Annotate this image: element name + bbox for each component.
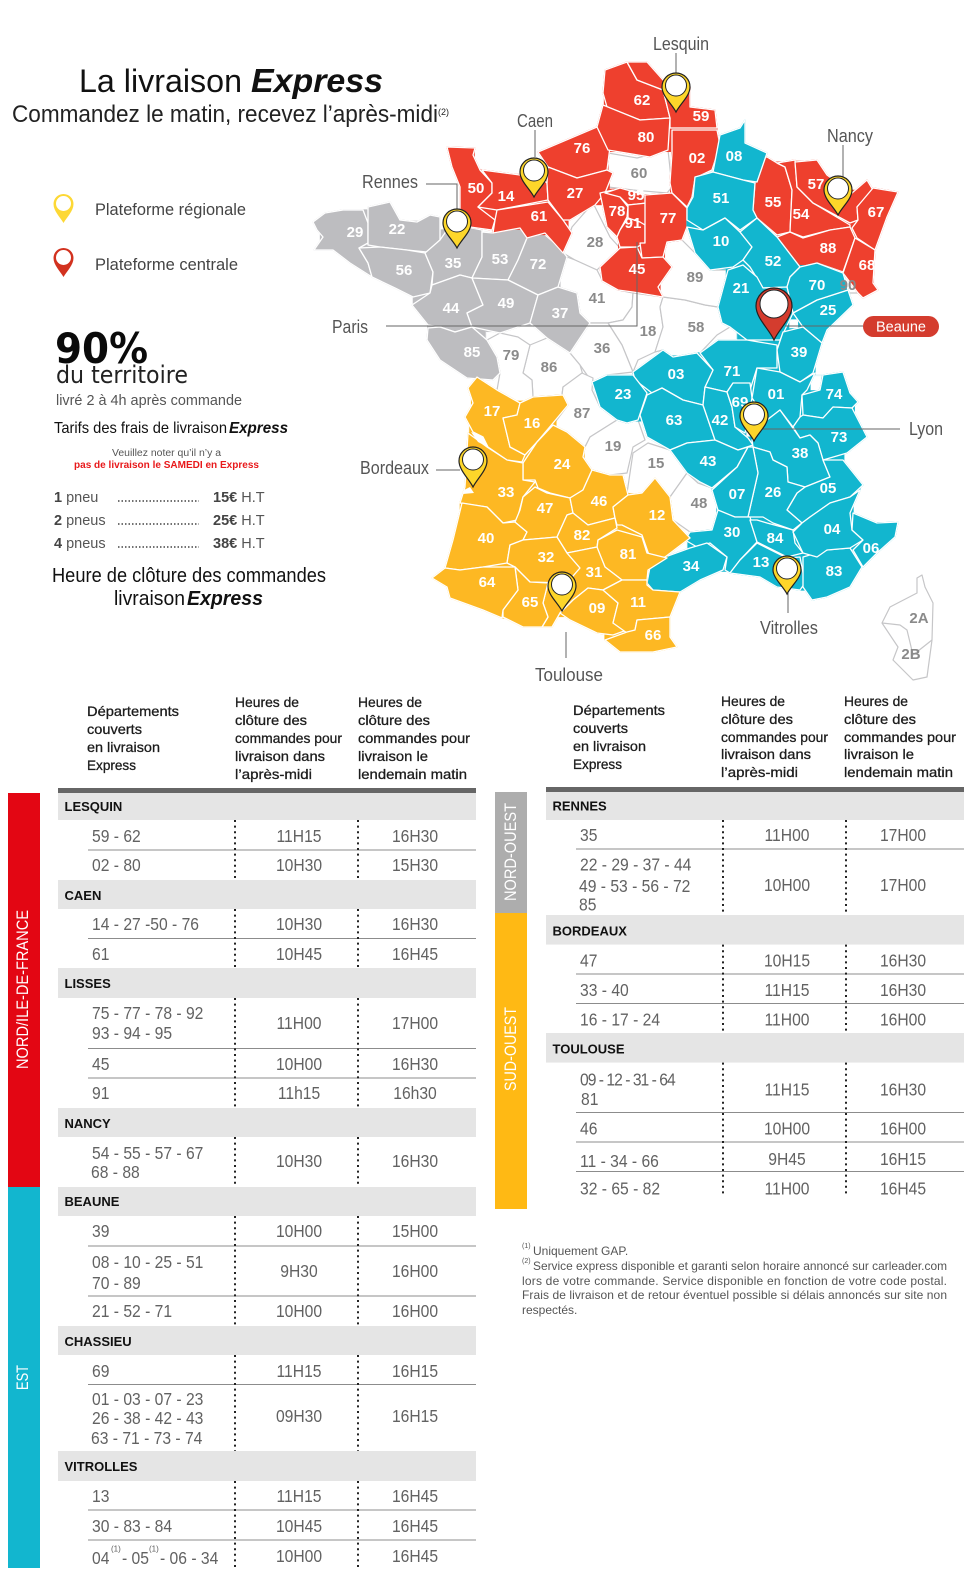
table: left: 93 - 94 - 95 — [92, 1023, 172, 1043]
table: right: TOULOUSE — [552, 1042, 625, 1056]
table: left: 16H30 — [392, 1054, 438, 1074]
callout: Caen: Caen — [517, 111, 553, 131]
table: right: 10H00 — [764, 1118, 810, 1139]
table: left: 01 - 03 - 07 - 23 — [92, 1389, 203, 1409]
department numbers: 68 — [859, 257, 875, 274]
table: left: 69 — [92, 1361, 109, 1381]
stat: 90% du territoire: livré 2 à 4h après commande — [56, 393, 242, 409]
table: left: CAEN — [64, 888, 101, 903]
department numbers: 66 — [645, 627, 661, 644]
callout: Nancy: Nancy — [827, 126, 873, 146]
table: left headers: livraison dans — [235, 748, 325, 764]
table: left: 10H30 — [276, 855, 322, 875]
department numbers: 70 — [809, 277, 825, 294]
department numbers: 43 — [700, 453, 716, 470]
table: right headers: commandes pour — [844, 729, 956, 745]
department numbers: 40 — [478, 530, 494, 547]
department numbers — [347, 92, 884, 644]
table: left: 09H30 — [276, 1406, 322, 1426]
title: Express — [251, 62, 383, 99]
department numbers: 26 — [765, 484, 781, 501]
footnotes: lors de votre commande. Service disponible en fonction de votre code postal. — [522, 1274, 947, 1288]
map of France: 48 — [691, 495, 707, 512]
callout: Beaune: Beaune — [876, 320, 926, 336]
table: right headers: livraison dans — [721, 746, 811, 762]
table: right — [546, 787, 964, 1199]
price list: 1 pneu — [54, 490, 98, 506]
department numbers: 78 — [609, 203, 625, 220]
table: left headers: lendemain matin — [358, 766, 467, 782]
table: left headers: clôture des — [235, 712, 307, 728]
stat: 90% du territoire — [55, 324, 242, 409]
heading: heure de clôture: Heure de clôture des commandes — [52, 565, 326, 587]
department numbers: 42 — [712, 412, 728, 429]
notice: samedi: Veuillez noter qu’il n’y a — [112, 448, 221, 459]
department numbers: 17 — [484, 403, 500, 420]
legend: plateforme régionale: Plateforme régionale — [95, 200, 246, 219]
table: left: 10H00 — [276, 1054, 322, 1074]
table: left headers: clôture des — [358, 712, 430, 728]
table: left: LESQUIN — [64, 799, 122, 814]
department numbers: 47 — [537, 500, 553, 517]
table: right: 11H00 — [765, 1009, 809, 1030]
table: right headers: en livraison — [573, 738, 646, 754]
department numbers: 61 — [531, 208, 547, 225]
map of France: 15 — [648, 455, 664, 472]
callout: Bordeaux — [360, 447, 487, 487]
table: right: 11H00 — [765, 1178, 809, 1199]
table: left: 10H30 — [276, 914, 322, 934]
department numbers: 67 — [868, 204, 884, 221]
notice: samedi: pas de livraison le SAMEDI en Express — [74, 460, 259, 471]
table: left: 26 - 38 - 42 - 43 — [92, 1408, 203, 1428]
side label: nord/ile-de-france — [8, 793, 40, 1187]
table: left: (1) — [149, 1544, 159, 1553]
side label: nord/ile-de-france: NORD/ILE-DE-FRANCE — [13, 910, 32, 1069]
department numbers: 27 — [567, 185, 583, 202]
table: right headers: clôture des — [721, 711, 793, 727]
table: left: 10H45 — [276, 1516, 322, 1536]
subtitle: (2) — [438, 107, 449, 117]
side label: nord-ouest — [495, 792, 527, 913]
callout: Lyon: Lyon — [909, 419, 943, 439]
table: left: 11H15 — [277, 1361, 321, 1381]
table: left: 13 — [92, 1486, 109, 1506]
table: left: 16H15 — [392, 1361, 438, 1381]
map of France: 90 — [840, 277, 856, 294]
table: left: 10H00 — [276, 1546, 322, 1566]
table: left headers — [87, 694, 470, 782]
department numbers: 82 — [574, 527, 590, 544]
department numbers: 45 — [629, 261, 645, 278]
side label: sud-ouest — [495, 913, 527, 1209]
table: right: 22 - 29 - 37 - 44 — [580, 855, 691, 875]
department numbers: 50 — [468, 180, 484, 197]
table: left: 16H45 — [392, 1516, 438, 1536]
table: right headers: livraison le — [844, 746, 914, 762]
map of France: 60 — [631, 165, 647, 182]
table: left: 45 — [92, 1054, 109, 1074]
table: right: 11H15 — [765, 980, 809, 1000]
footnotes: respectés. — [522, 1303, 577, 1317]
table: left: 04 — [92, 1548, 109, 1568]
estuary — [463, 432, 488, 494]
department numbers: 73 — [831, 429, 847, 446]
department numbers: 34 — [683, 558, 700, 575]
table: left: 70 - 89 — [92, 1273, 141, 1293]
table: left: 10H30 — [276, 1151, 322, 1171]
callout: Rennes: Rennes — [362, 172, 418, 192]
department numbers: 65 — [522, 594, 538, 611]
table: right headers: couverts — [573, 720, 628, 736]
table: left: 16H45 — [392, 944, 438, 964]
region: nord-ouest (grey) — [313, 202, 590, 380]
table: right headers: clôture des — [844, 711, 916, 727]
table: left: 16H30 — [392, 826, 438, 846]
region: sud-ouest (orange) — [432, 377, 690, 652]
table: left headers: livraison le — [358, 748, 428, 764]
department numbers: 12 — [649, 507, 665, 524]
department numbers: 46 — [591, 493, 607, 510]
department numbers: 08 — [726, 148, 742, 165]
table: right headers: Départements — [573, 702, 665, 718]
footnotes: Service express disponible et garanti selon horaire annoncé sur carleader.com — [533, 1259, 947, 1273]
heading: tarifs: Express — [229, 420, 288, 437]
legend: plateforme centrale — [54, 248, 238, 277]
table: left: 39 — [92, 1221, 109, 1241]
table: left: 61 — [92, 944, 109, 964]
map of France: 79 — [503, 347, 519, 364]
callout: Beaune — [756, 288, 939, 340]
table: left: 16H30 — [392, 914, 438, 934]
department numbers: 91 — [625, 215, 641, 232]
table: right: 10H00 — [764, 875, 810, 895]
table: left: 10H45 — [276, 944, 322, 964]
department numbers: 21 — [733, 280, 749, 297]
side label: nord-ouest: NORD-OUEST — [501, 803, 520, 901]
department numbers: 29 — [347, 224, 363, 241]
table: left headers: Express — [87, 757, 136, 773]
callout: Caen — [517, 111, 553, 197]
department numbers: 88 — [820, 240, 836, 257]
table: left: 17H00 — [392, 1013, 438, 1033]
table: right headers: lendemain matin — [844, 764, 953, 780]
table: right: RENNES — [552, 798, 607, 814]
table: left: - 06 - 34 — [160, 1548, 218, 1568]
department numbers: 25 — [820, 302, 836, 319]
map of France: 19 — [605, 438, 621, 455]
footnotes: Uniquement GAP. — [533, 1244, 628, 1258]
table: right: 33 - 40 — [580, 980, 629, 1000]
table: right: 16H00 — [880, 1118, 926, 1139]
table: right: 35 — [580, 825, 597, 845]
title — [79, 62, 383, 99]
department numbers: 63 — [666, 412, 682, 429]
table: left: 10H00 — [276, 1301, 322, 1321]
table: right headers: Heures de — [844, 693, 908, 709]
table: left: 16H15 — [392, 1406, 438, 1426]
price list — [54, 490, 265, 552]
table: right: 17H00 — [880, 875, 926, 895]
department numbers: 16 — [524, 415, 540, 432]
table: left: 30 - 83 - 84 — [92, 1516, 172, 1536]
title: La livraison — [79, 63, 242, 99]
callout: Lesquin — [653, 34, 709, 112]
department numbers: 33 — [498, 484, 514, 501]
table: left: - 05 — [122, 1548, 149, 1568]
table: left: 11H00 — [277, 1013, 321, 1033]
price list: 25€ H.T — [213, 513, 265, 529]
table: right: 46 — [580, 1118, 597, 1139]
table: right: BORDEAUX — [552, 924, 627, 938]
department numbers: 37 — [552, 305, 568, 322]
table: left headers: l’après-midi — [235, 766, 312, 782]
department numbers: 13 — [753, 554, 769, 571]
callout: Toulouse: Toulouse — [535, 665, 603, 685]
table: left: 75 - 77 - 78 - 92 — [92, 1003, 203, 1023]
map of France: 58 — [688, 319, 704, 336]
footnotes: (2) — [522, 1258, 531, 1265]
department numbers: 11 — [630, 594, 646, 611]
callout: Vitrolles — [760, 556, 818, 638]
table: right: 16H00 — [880, 1009, 926, 1030]
table: left: 11h15 — [278, 1083, 320, 1103]
table: left headers: commandes pour — [358, 730, 470, 746]
department numbers: 03 — [668, 366, 684, 383]
callout: Lesquin: Lesquin — [653, 34, 709, 54]
department numbers: 62 — [634, 92, 650, 109]
table: left: 02 - 80 — [92, 855, 141, 875]
table: left: 15H00 — [392, 1221, 438, 1241]
price list: 15€ H.T — [213, 490, 265, 506]
department numbers: 01 — [768, 386, 784, 403]
callout: Vitrolles: Vitrolles — [760, 618, 818, 638]
table: right: 9H45 — [768, 1149, 806, 1169]
department numbers: 57 — [808, 176, 824, 193]
map of France: 18 — [640, 323, 656, 340]
table: left: BEAUNE — [64, 1194, 120, 1209]
table: right: 16 - 17 - 24 — [580, 1009, 660, 1030]
side label: est — [8, 1187, 40, 1568]
department numbers: 76 — [574, 140, 590, 157]
department numbers: 95 — [628, 187, 644, 204]
table: right: 16H30 — [880, 980, 926, 1000]
department numbers: 31 — [586, 564, 602, 581]
notice: samedi — [74, 448, 259, 471]
side label: sud-ouest: SUD-OUEST — [501, 1007, 520, 1091]
department numbers: 10 — [713, 233, 729, 250]
table: left headers: Départements — [87, 703, 179, 719]
table: left headers: Heures de — [235, 694, 299, 710]
department numbers: 84 — [767, 530, 784, 547]
table: right headers: l’après-midi — [721, 764, 798, 780]
table: left: 15H30 — [392, 855, 438, 875]
side label: est: EST — [13, 1365, 32, 1390]
table: left headers: Heures de — [358, 694, 422, 710]
table: right: 16H15 — [880, 1149, 926, 1169]
region: nord / ile-de-france (red) — [447, 62, 898, 298]
table: right: 11H00 — [765, 825, 809, 845]
table: left: 11H15 — [277, 826, 321, 846]
department numbers: 32 — [538, 549, 554, 566]
table: right headers: Heures de — [721, 693, 785, 709]
map of France — [313, 62, 933, 680]
department numbers: 85 — [464, 344, 480, 361]
table: right: 49 - 53 - 56 - 72 — [579, 876, 690, 896]
department numbers: 72 — [530, 256, 546, 273]
footnotes — [522, 1243, 947, 1317]
table: right: 11H15 — [765, 1079, 809, 1100]
department numbers: 81 — [620, 546, 636, 563]
department numbers: 64 — [479, 574, 496, 591]
table: left headers: commandes pour — [235, 730, 342, 746]
stat: 90% du territoire: du territoire — [56, 361, 188, 389]
table: right: 10H15 — [764, 950, 810, 971]
table: left headers: couverts — [87, 721, 142, 737]
price list: 2 pneus — [54, 513, 106, 529]
department numbers: 02 — [689, 150, 705, 167]
department numbers: 52 — [765, 253, 781, 270]
table: right: 81 — [581, 1089, 598, 1109]
footnotes: (1) — [522, 1243, 531, 1250]
table: left: 68 - 88 — [91, 1162, 140, 1182]
table: left: 14 - 27 -50 - 76 — [92, 914, 199, 934]
callout: Paris — [332, 242, 637, 337]
table: left: 16H45 — [392, 1546, 438, 1566]
department numbers: 39 — [791, 344, 807, 361]
map of France: 2B — [901, 646, 921, 663]
callout: Lyon — [740, 402, 943, 441]
table: right: 11 - 34 - 66 — [580, 1151, 659, 1171]
table: left: NANCY — [64, 1116, 111, 1131]
table: right: 16H30 — [880, 1079, 926, 1100]
table: right: 47 — [580, 950, 597, 971]
table: left: 59 - 62 — [92, 826, 141, 846]
department numbers: 30 — [724, 524, 740, 541]
map of France: 36 — [594, 340, 610, 357]
department numbers: 44 — [443, 300, 460, 317]
table: right: 16H30 — [880, 950, 926, 971]
table: left: 08 - 10 - 25 - 51 — [92, 1252, 203, 1272]
department numbers: 23 — [615, 386, 631, 403]
price list: 38€ H.T — [213, 536, 265, 552]
table: left: CHASSIEU — [64, 1334, 132, 1349]
map of France: 41 — [589, 290, 605, 307]
table: right: 16H45 — [880, 1178, 926, 1199]
region: est (teal) — [592, 120, 898, 600]
footnotes: Frais de livraison et de retour éventuel possible si délais annoncés sur site non — [522, 1288, 947, 1302]
department numbers: 71 — [724, 363, 740, 380]
department numbers: 05 — [820, 480, 836, 497]
table: left — [58, 788, 476, 1568]
price list: 4 pneus — [54, 536, 106, 552]
table: left: 9H30 — [280, 1261, 318, 1281]
table: right: 09 - 12 - 31 - 64 — [580, 1069, 676, 1090]
table: right: 17H00 — [880, 825, 926, 845]
legend: plateforme centrale: Plateforme centrale — [95, 255, 238, 274]
stat: 90% du territoire: 90% — [55, 324, 148, 373]
heading: tarifs: Tarifs des frais de livraison — [54, 420, 227, 437]
map of France: 89 — [687, 269, 703, 286]
map of France: 86 — [541, 359, 557, 376]
heading: heure de clôture: livraison — [114, 588, 185, 610]
table: left: 16H00 — [392, 1301, 438, 1321]
callout: Rennes — [362, 172, 471, 248]
map of France: 87 — [574, 405, 590, 422]
department numbers: 35 — [445, 255, 461, 272]
department numbers: 04 — [824, 521, 841, 538]
table: right headers: commandes pour — [721, 729, 828, 745]
department numbers: 38 — [792, 445, 808, 462]
table: left: 16H30 — [392, 1151, 438, 1171]
heading: heure de clôture — [52, 565, 326, 610]
table: right headers: Express — [573, 756, 622, 772]
callout: Bordeaux: Bordeaux — [360, 458, 429, 478]
callout: Paris: Paris — [332, 317, 368, 337]
department numbers: 83 — [826, 563, 842, 580]
department numbers: 54 — [793, 206, 810, 223]
callout: Toulouse — [535, 572, 603, 685]
legend: plateforme régionale — [54, 194, 246, 223]
table: right: 32 - 65 - 82 — [580, 1178, 660, 1199]
department numbers: 51 — [713, 190, 729, 207]
table: left: 63 - 71 - 73 - 74 — [91, 1428, 202, 1448]
department numbers: 49 — [498, 295, 514, 312]
table: left: LISSES — [64, 976, 111, 991]
map of France: 28 — [587, 234, 603, 251]
department numbers: 74 — [826, 386, 843, 403]
table: left: 11H15 — [277, 1486, 321, 1506]
subtitle: Commandez le matin, recevez l’après-midi — [12, 101, 438, 128]
table: left: 16h30 — [393, 1083, 437, 1103]
table: right: 85 — [579, 894, 596, 915]
department numbers: 80 — [638, 129, 654, 146]
table: left: 16H45 — [392, 1486, 438, 1506]
table: right headers — [573, 693, 956, 780]
department numbers: 14 — [498, 188, 515, 205]
table: left: 91 — [92, 1083, 109, 1103]
department numbers: 53 — [492, 251, 508, 268]
department numbers: 09 — [589, 600, 605, 617]
department numbers: 77 — [660, 210, 676, 227]
table: left: VITROLLES — [64, 1459, 138, 1474]
department numbers: 24 — [554, 456, 571, 473]
map of France: 2A — [909, 610, 929, 627]
department numbers: 07 — [729, 486, 745, 503]
callout: Nancy — [824, 126, 873, 215]
department numbers: 69 — [732, 394, 748, 411]
department numbers: 59 — [693, 108, 709, 125]
table: left: (1) — [111, 1544, 121, 1553]
table: left headers: en livraison — [87, 739, 160, 755]
department numbers: 22 — [389, 221, 405, 238]
department numbers: 56 — [396, 262, 412, 279]
table: left: 21 - 52 - 71 — [92, 1301, 172, 1321]
table: left: 10H00 — [276, 1221, 322, 1241]
table: left: 16H00 — [392, 1261, 438, 1281]
departments without service — [487, 150, 933, 680]
heading: heure de clôture: Express — [187, 588, 263, 610]
department numbers: 55 — [765, 194, 781, 211]
table: left: 54 - 55 - 57 - 67 — [92, 1143, 203, 1163]
department numbers: 06 — [863, 540, 879, 557]
